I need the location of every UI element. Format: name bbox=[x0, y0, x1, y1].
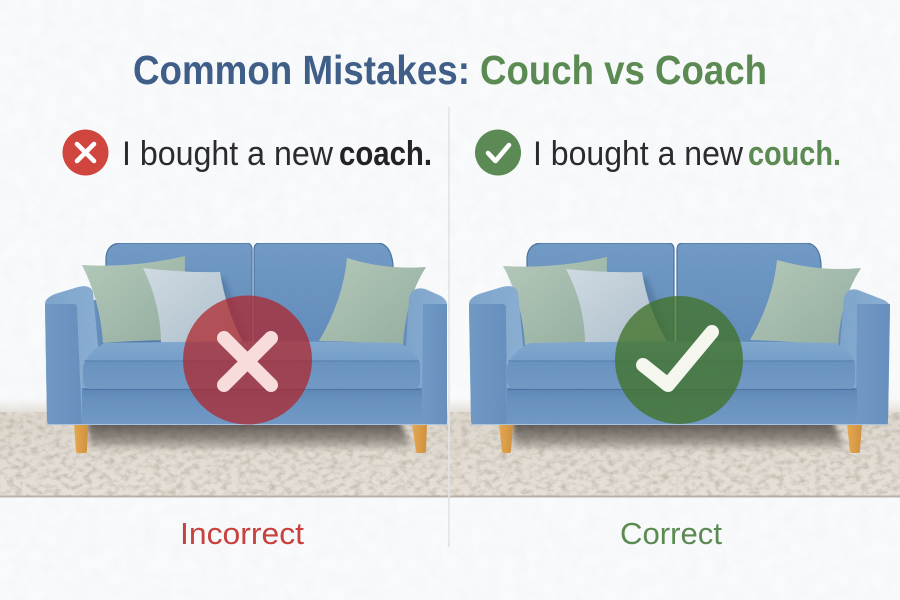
legs bbox=[499, 424, 862, 453]
sentence: incorrect: I bought a new bbox=[122, 135, 333, 173]
sentence: incorrect: coach. bbox=[339, 135, 432, 173]
base edge bbox=[47, 424, 447, 426]
title: Couch vs Coach bbox=[480, 47, 767, 93]
title bbox=[133, 47, 767, 93]
arms bbox=[45, 286, 447, 425]
pillows bbox=[503, 257, 861, 347]
sentence: correct: I bought a new bbox=[533, 135, 743, 173]
icon: red cross badge bbox=[62, 130, 108, 176]
title: Common Mistakes: bbox=[133, 47, 470, 93]
icon: green check badge bbox=[475, 130, 521, 176]
sentence: correct: couch. bbox=[748, 135, 841, 173]
legs bbox=[74, 424, 427, 453]
floor shadows bbox=[88, 420, 846, 449]
arms bbox=[469, 286, 890, 425]
back cushions bbox=[516, 243, 846, 348]
label: correct: Correct bbox=[620, 516, 722, 551]
icon: large green check overlay bbox=[615, 296, 743, 424]
panel: correct sentence bbox=[475, 130, 841, 176]
sofa: correct bbox=[469, 243, 890, 453]
pillows bbox=[82, 256, 426, 347]
sofa base bbox=[82, 388, 422, 425]
carpet floor bbox=[0, 398, 900, 498]
label: incorrect: Incorrect bbox=[180, 516, 304, 551]
icon: large red cross overlay bbox=[183, 296, 312, 424]
back cushions bbox=[92, 243, 412, 348]
center divider bbox=[448, 107, 450, 547]
seat cushion bbox=[83, 342, 420, 390]
sofa: incorrect bbox=[45, 243, 447, 453]
carpet seam bbox=[448, 405, 450, 497]
sofa base bbox=[507, 388, 857, 425]
seat cushion bbox=[507, 342, 855, 390]
panel: incorrect sentence bbox=[62, 130, 432, 176]
base edge bbox=[471, 424, 888, 426]
